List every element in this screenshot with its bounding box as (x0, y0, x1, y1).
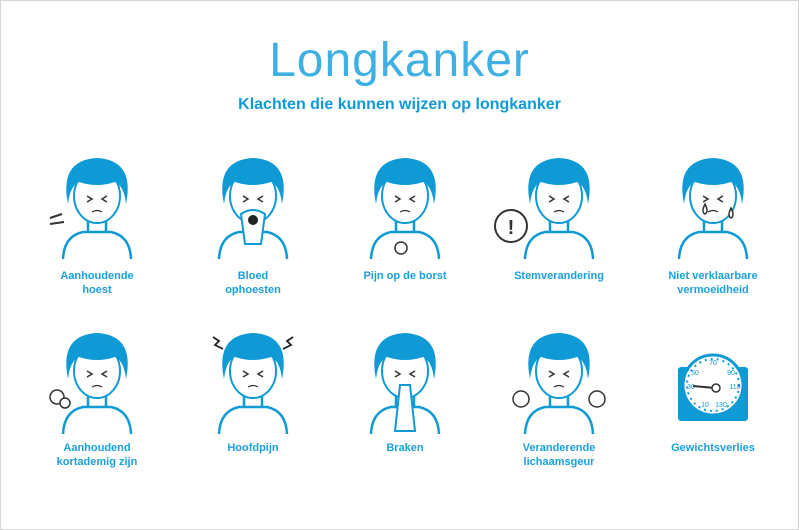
text: vermoeidheid (677, 284, 749, 296)
icon: weight scale: 70 (709, 360, 717, 367)
icon: weight scale: 130 (715, 402, 727, 409)
text: lichaamsgeur (524, 456, 594, 468)
icon: coughing blood (219, 158, 287, 259)
icon: voice change: ! (508, 217, 514, 239)
text: Aanhoudend (63, 442, 131, 454)
text: Pijn op de borst (363, 270, 447, 282)
icon: shortness of breath (50, 333, 131, 434)
icon: coughing (50, 158, 131, 259)
text: Gewichtsverlies (671, 442, 755, 454)
text: Veranderende (523, 442, 595, 454)
icon: weight scale: 30 (687, 384, 695, 391)
icon: weight scale: 110 (729, 384, 741, 391)
icon: vomiting (371, 333, 439, 434)
icon: body odour (513, 333, 605, 434)
text: Bloed (238, 270, 268, 282)
icon: weight scale (678, 355, 748, 421)
icon: voice change (495, 158, 593, 259)
title: Longkanker (269, 34, 530, 87)
text: Stemverandering (514, 270, 604, 282)
icon: fatigue (679, 158, 747, 259)
text: kortademig zijn (57, 456, 137, 468)
labels (60, 270, 134, 296)
icon: weight scale: 50 (691, 370, 699, 377)
text: Niet verklaarbare (668, 270, 758, 282)
text: ophoesten (225, 284, 281, 296)
icon: headache (213, 333, 293, 434)
subtitle: Klachten die kunnen wijzen op longkanker (238, 96, 561, 113)
text: Braken (386, 442, 424, 454)
text: Hoofdpijn (227, 442, 279, 454)
labels: hoest (82, 284, 112, 296)
icon: weight scale: 90 (727, 370, 735, 377)
icon: weight scale: 10 (701, 402, 709, 409)
labels: Aanhoudende (60, 270, 134, 282)
icon: chest pain (371, 158, 439, 259)
